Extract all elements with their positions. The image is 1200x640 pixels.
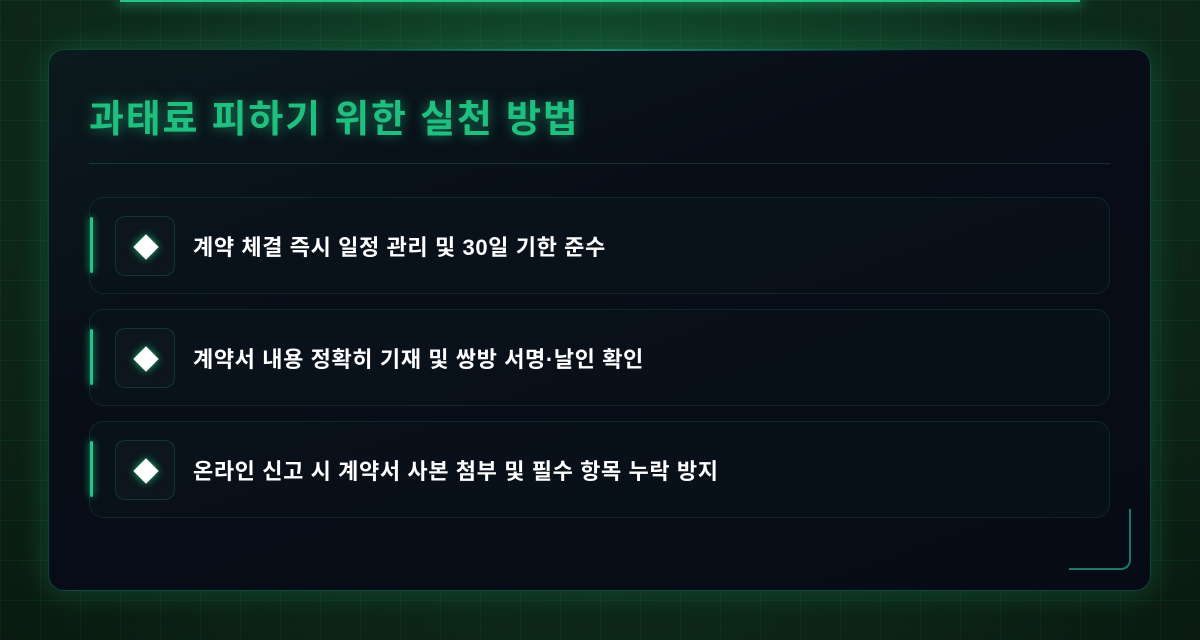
panel: card (48, 49, 1151, 591)
text 3: 온라인 신고 시 계약서 사본 첨부 및 필수 항목 누락 방지 (193, 459, 719, 484)
text 1: 계약 체결 즉시 일정 관리 및 30일 기한 준수 (193, 235, 606, 260)
icon: diamond (115, 328, 175, 388)
corner bracket (1069, 509, 1131, 570)
title: 과태료 피하기 위한 실천 방법 (89, 99, 580, 141)
icon: diamond (115, 440, 175, 500)
text 2: 계약서 내용 정확히 기재 및 쌍방 서명·날인 확인 (193, 347, 644, 372)
item 2 (89, 309, 1110, 406)
item 1 (89, 197, 1110, 294)
item 3 (89, 421, 1110, 518)
icon: diamond (115, 216, 175, 276)
